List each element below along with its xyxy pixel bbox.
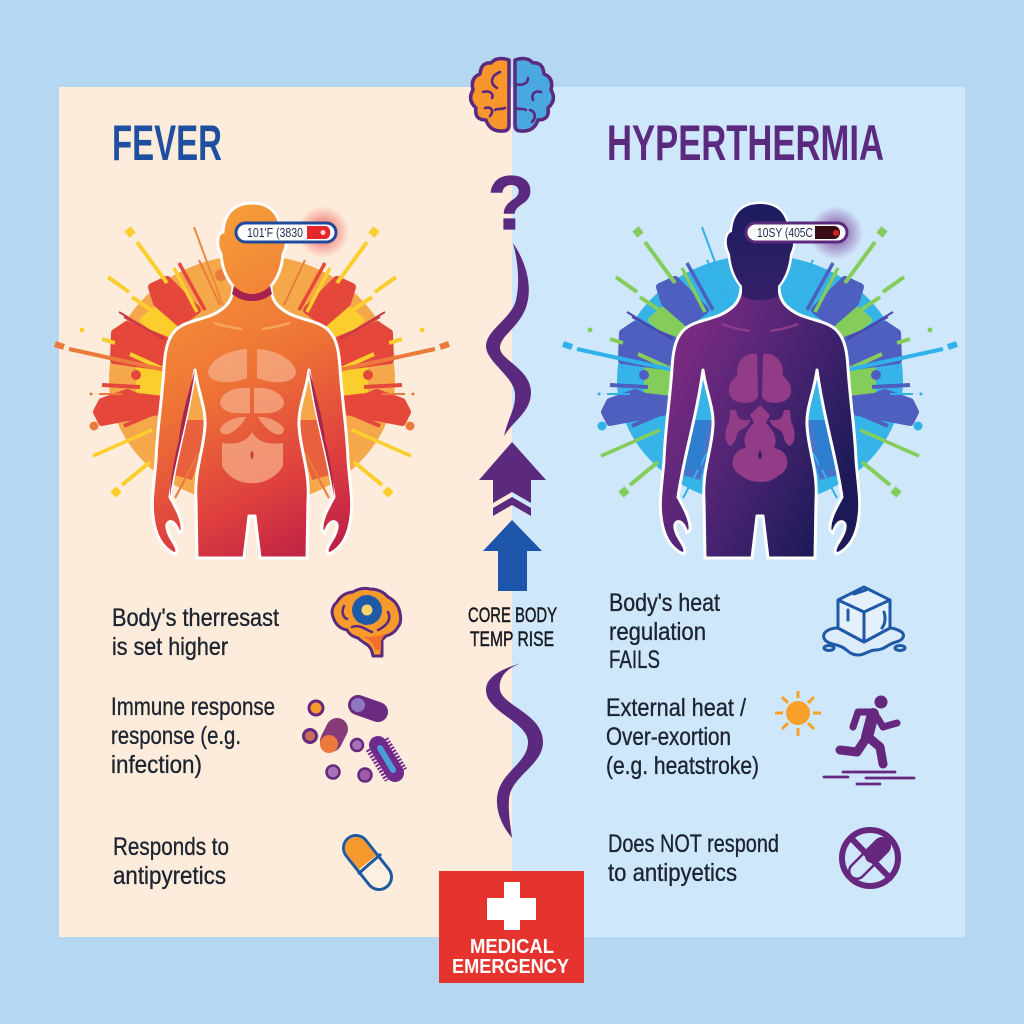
text: responds to antipyretics: antipyretics: [113, 862, 226, 890]
icon: white cross: [487, 882, 536, 930]
text: heat regulation fails: regulation: [609, 618, 706, 646]
organs: [208, 349, 296, 483]
icon: split brain: [471, 59, 553, 131]
badge label: [452, 936, 570, 978]
thermometer badge: hyperthermia: 10SY (405C: [757, 225, 813, 240]
label: core body temp rise: [468, 604, 557, 651]
thermometer badge: fever: [236, 206, 349, 258]
navel: [758, 451, 762, 459]
body silhouette: [660, 203, 860, 558]
text: external heat: (e.g. heatstroke): [606, 752, 759, 780]
thermometer badge: hyperthermia: [746, 206, 863, 260]
icon: capsule: [345, 837, 381, 877]
figure: fever body with burst: [55, 203, 449, 558]
icon: runner: [824, 696, 914, 784]
label: core body temp rise: TEMP RISE: [470, 628, 554, 651]
question mark: ?: [488, 161, 534, 246]
burst backdrop: [563, 226, 957, 505]
badge label: MEDICAL: [470, 936, 554, 958]
text: no response to antipyretics: Does NOT respond: [608, 830, 779, 858]
text: responds to antipyretics: [113, 833, 229, 890]
text: thermostat: is set higher: [112, 633, 228, 661]
arrow: purple rise: [479, 442, 546, 516]
arm shading: [170, 370, 334, 497]
panel: hyperthermia: [512, 87, 965, 937]
burst backdrop: [55, 226, 449, 505]
icon: no pill: [842, 830, 898, 886]
neck collar: [232, 286, 272, 301]
lower squiggle: [486, 663, 543, 838]
text: thermostat: Body's therresast: [112, 604, 279, 632]
panel: fever: [59, 87, 512, 937]
text: external heat: [606, 694, 759, 780]
icon: germs: [304, 698, 396, 782]
text: thermostat: [112, 604, 279, 661]
text: immune response: infection): [111, 751, 202, 779]
text: no response to antipyretics: [608, 830, 779, 887]
text: responds to antipyretics: Responds to: [113, 833, 229, 861]
icon: sun: [775, 691, 821, 736]
text: heat regulation fails: [609, 589, 720, 674]
label: core body temp rise: CORE BODY: [468, 604, 557, 627]
text: immune response: response (e.g.: [111, 722, 241, 750]
arrow: blue rise: [483, 520, 542, 591]
thermometer badge: fever: 101'F (3830: [247, 225, 303, 240]
icon: melting ice cube: [824, 587, 905, 655]
icon: brain with gear: [332, 588, 401, 656]
text: immune response: [111, 693, 275, 779]
text: heat regulation fails: Body's heat: [609, 589, 720, 617]
body silhouette: [152, 203, 352, 558]
collarbones: [214, 323, 290, 329]
navel: [250, 451, 254, 459]
text: immune response: Immune response: [111, 693, 275, 721]
text: no response to antipyretics: to antipyetics: [608, 859, 737, 887]
collarbones: [722, 324, 798, 331]
badge label: EMERGENCY: [452, 956, 570, 978]
head shading: [727, 204, 793, 300]
figure: hyperthermia body with burst: [563, 203, 957, 558]
text: external heat: Over-exortion: [606, 723, 731, 751]
text: heat regulation fails: FAILS: [609, 646, 660, 674]
title: hyperthermia: HYPERTHERMIA: [607, 115, 884, 171]
title: fever: FEVER: [112, 115, 222, 171]
badge: medical emergency: [439, 871, 584, 983]
text: external heat: External heat /: [606, 694, 746, 722]
upper squiggle: [486, 243, 531, 436]
organs: [725, 354, 795, 482]
